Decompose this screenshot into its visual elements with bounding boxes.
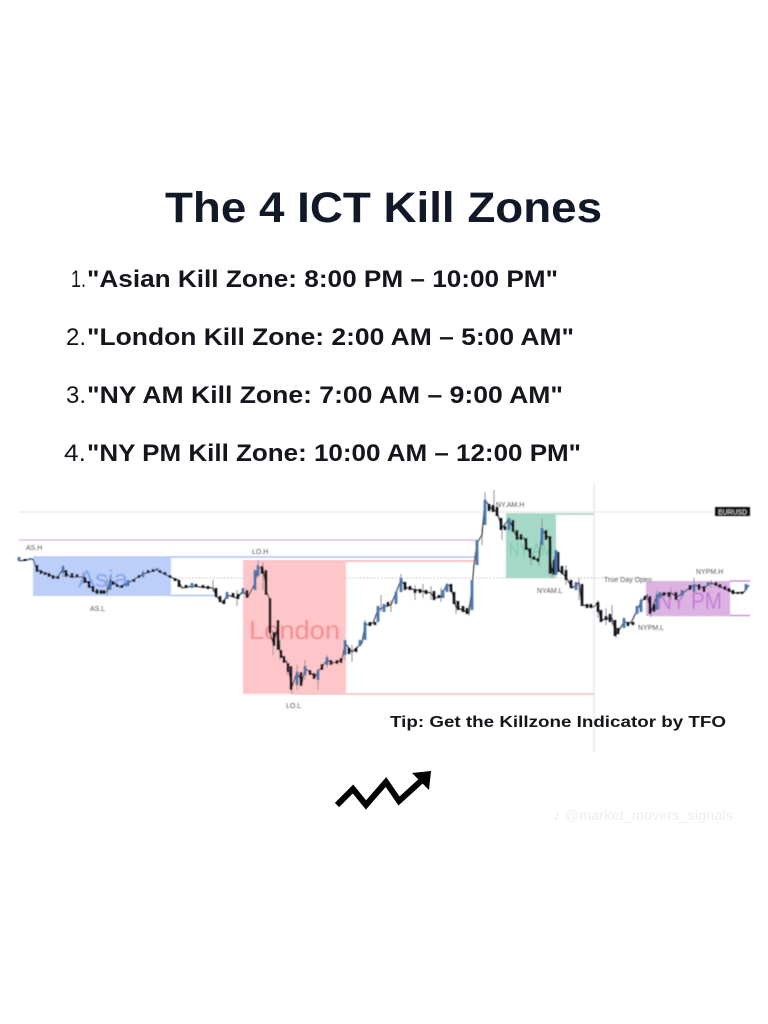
tip text: Tip: Get the Killzone Indicator by TFO — [390, 714, 726, 731]
item 3: NY AM: "NY AM Kill Zone: 7:00 AM – 9:00 AM" — [87, 382, 563, 409]
price chart — [19, 484, 750, 752]
zone: NY AM: NY AM — [509, 540, 553, 560]
label: LO.L: LO.L — [286, 703, 301, 710]
title: The 4 ICT Kill Zones — [165, 184, 602, 232]
zone: NY AM — [506, 514, 556, 578]
label: AS.L: AS.L — [90, 606, 105, 613]
symbol tag: EURUSD — [715, 507, 750, 516]
label: LO.H: LO.H — [252, 549, 268, 556]
blue up candles — [19, 500, 746, 685]
item 2: London: "London Kill Zone: 2:00 AM – 5:00 AM" — [87, 324, 574, 351]
item 4: NY PM: 4. — [64, 440, 86, 467]
zone: Asia: Asia — [78, 566, 129, 593]
candle wicks — [63, 490, 711, 694]
symbol tag: EURUSD: EURUSD — [718, 510, 747, 516]
zone: Asia — [33, 557, 171, 596]
dark down candles — [25, 504, 742, 690]
label: NYAM.L: NYAM.L — [537, 588, 563, 595]
watermark: ♪ @market_movers_signals — [553, 807, 733, 823]
item 1: Asian: "Asian Kill Zone: 8:00 PM – 10:00 PM" — [87, 266, 558, 293]
label: NYPM.H: NYPM.H — [696, 569, 723, 576]
item 3: NY AM: 3. — [66, 382, 86, 409]
label: AS.H: AS.H — [26, 545, 42, 552]
item 2: London: 2. — [66, 324, 86, 351]
label: True Day Open: True Day Open — [604, 577, 652, 584]
kill zone list — [64, 266, 581, 467]
icon: rising zigzag arrow — [337, 771, 431, 805]
label: NYPM.L: NYPM.L — [638, 625, 664, 632]
item 1: Asian: 1. — [71, 266, 86, 293]
zone: NY PM: NY PM — [657, 588, 722, 615]
zone: NY PM — [646, 581, 730, 616]
thin price line — [19, 500, 749, 687]
item 4: NY PM: "NY PM Kill Zone: 10:00 AM – 12:00 PM" — [87, 440, 581, 467]
zone: London — [243, 561, 346, 694]
zone: London: London — [249, 615, 340, 645]
label: NY.AM.H: NY.AM.H — [496, 502, 524, 509]
